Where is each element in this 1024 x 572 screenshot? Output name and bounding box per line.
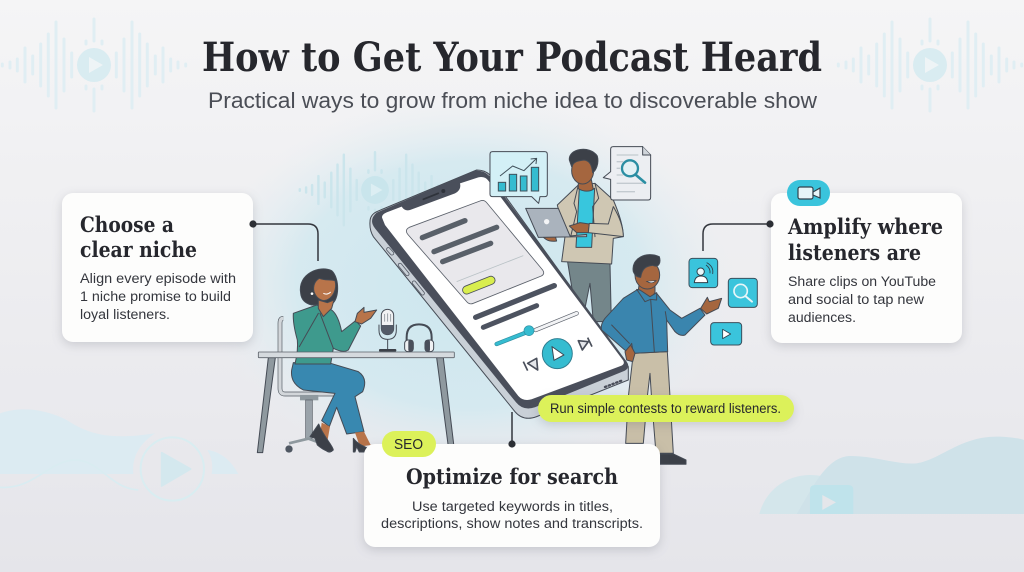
- heading: Optimize for search: [406, 464, 618, 489]
- heading: [80, 212, 197, 262]
- icon: waveform centre: [300, 152, 450, 228]
- heading: Amplify where: [787, 214, 943, 239]
- trousers: [626, 352, 673, 453]
- body text: [381, 499, 643, 531]
- panel: choose a clear niche: [62, 193, 253, 342]
- figure: presenting man: [601, 255, 757, 464]
- callout: contests pill: [538, 395, 794, 422]
- shoes: [310, 423, 372, 452]
- subtitle: Practical ways to grow from niche idea to discoverable show: [208, 88, 817, 113]
- pants: [291, 363, 365, 434]
- icon tile: magnifier: [728, 278, 757, 307]
- shoe: [660, 454, 686, 464]
- connector dot: [508, 440, 516, 448]
- title: How to Get Your Podcast Heard: [202, 34, 822, 81]
- icon: waveform left: [2, 19, 186, 111]
- phone side buttons: [388, 249, 423, 293]
- connector: amplify card to icons: [703, 220, 774, 251]
- headphones: [405, 324, 434, 352]
- phone content panel: [406, 200, 544, 304]
- body text: Align every episode with: [80, 271, 236, 286]
- phone text bars: [476, 286, 554, 327]
- body text: and social to tap new: [788, 292, 924, 307]
- phone audio slider: [497, 313, 577, 344]
- SEO pill: [382, 431, 436, 457]
- connector: search card to phone: [511, 412, 513, 444]
- decorative hills with play icon, bottom left: [0, 409, 238, 501]
- heading: listeners are: [788, 240, 921, 265]
- figure: standing man with laptop (body): [557, 149, 623, 322]
- desk: [257, 352, 454, 453]
- body text: Use targeted keywords in titles,: [412, 499, 613, 514]
- panel: optimize for search: [364, 431, 660, 547]
- body text: [788, 274, 936, 325]
- phone play controls: [523, 338, 592, 371]
- phone speaker and camera: [423, 189, 445, 199]
- icon: chart speech bubble: [490, 152, 547, 203]
- body text: loyal listeners.: [80, 307, 170, 322]
- hands: [625, 297, 722, 362]
- icon: document with magnifier: [603, 147, 651, 200]
- heading: clear niche: [80, 237, 197, 262]
- heading: Choose a: [80, 212, 174, 237]
- phone bottom grille: [605, 380, 623, 387]
- neck and head: [633, 255, 660, 302]
- microphone: [379, 309, 396, 352]
- body text: descriptions, show notes and transcripts.: [381, 516, 643, 531]
- icon tile: video play: [711, 323, 742, 345]
- head and hair: [300, 269, 338, 305]
- body text: audiences.: [788, 310, 856, 325]
- figure: woman at podcast desk: [257, 269, 454, 453]
- icon tile: broadcasting person: [689, 258, 718, 288]
- laptop and hands: [526, 207, 623, 241]
- chair: [280, 318, 335, 453]
- phone screen: [382, 177, 624, 400]
- hand at chin: [318, 300, 334, 317]
- icon: waveform right: [838, 19, 1022, 111]
- gesturing hand: [355, 307, 377, 324]
- heading: [787, 214, 943, 265]
- panel: amplify where listeners are: [771, 180, 962, 343]
- torso: [293, 305, 361, 364]
- video pill icon: [787, 180, 830, 206]
- body text: [80, 271, 236, 322]
- body text: 1 niche promise to build: [80, 289, 231, 304]
- body text: Share clips on YouTube: [788, 274, 936, 289]
- connector: niche card to woman: [249, 220, 318, 261]
- shirt: [601, 290, 705, 353]
- callout: contests pill: Run simple contests to reward listeners.: [550, 401, 781, 416]
- phone mockup: [370, 170, 628, 418]
- SEO pill: SEO: [394, 437, 423, 453]
- phone side body: [370, 170, 628, 418]
- decorative hills with play icon, bottom right: [759, 437, 1024, 514]
- phone bezel: [372, 171, 628, 409]
